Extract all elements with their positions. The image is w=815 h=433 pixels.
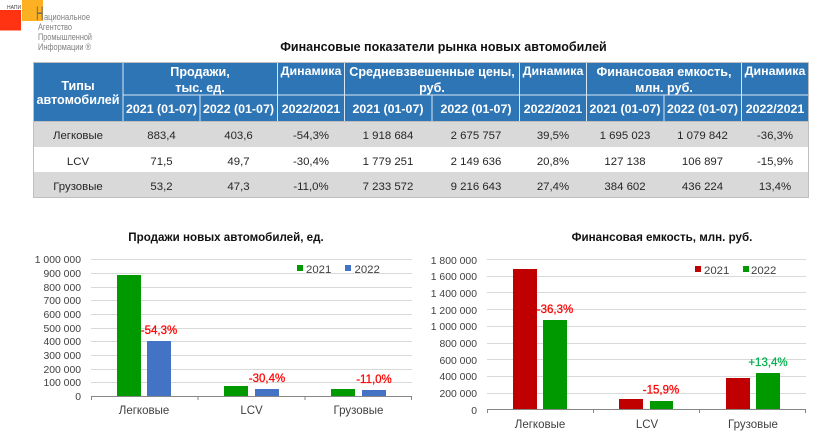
table row: LCV: 49,7	[227, 156, 250, 168]
table row: Грузовые: 13,4%	[759, 181, 791, 193]
table row: Легковые	[34, 122, 808, 147]
logo: НАПИ: Агентство	[38, 22, 72, 32]
y axis labels: sales: 600 000	[43, 310, 81, 321]
change labels: sales: -30,4%	[249, 373, 285, 385]
logo: НАПИ: ациональное	[44, 12, 90, 22]
bars: capacity 2022	[543, 320, 780, 409]
table header: 2021 (01-07)	[590, 102, 660, 116]
table row: Грузовые: 7 233 572	[363, 181, 413, 193]
y axis labels: financial capacity: 600 000	[439, 356, 477, 367]
y axis labels: financial capacity: 200 000	[439, 389, 477, 400]
y axis labels: financial capacity: 0	[471, 406, 477, 417]
table row: Грузовые: 436 224	[682, 181, 723, 193]
table row: Легковые: 403,6	[224, 130, 253, 142]
table row: Легковые: 1 918 684	[363, 130, 413, 142]
bars: capacity 2021	[513, 269, 750, 409]
y axis labels: financial capacity: 800 000	[439, 339, 477, 350]
y axis labels: sales: 400 000	[43, 337, 81, 348]
table row: Грузовые: 47,3	[227, 181, 250, 193]
y axis labels: financial capacity: 1 400 000	[431, 289, 477, 300]
title: Финансовые показатели рынка новых автомобилей	[280, 40, 607, 54]
chart title: sales: Продажи новых автомобилей, ед.	[128, 231, 324, 244]
change labels: sales: -54,3%	[141, 325, 177, 337]
table row: Легковые: 883,4	[147, 130, 176, 142]
legend: sales	[297, 264, 380, 276]
x axis labels: financial capacity: Легковые	[515, 419, 565, 431]
table row: Грузовые: 9 216 643	[451, 181, 501, 193]
bars: sales 2022	[147, 341, 386, 396]
table row: LCV: 1 779 251	[363, 156, 413, 168]
table row: Грузовые	[34, 172, 808, 197]
y axis labels: sales: 500 000	[43, 324, 81, 335]
table row: Грузовые: 53,2	[150, 181, 173, 193]
y axis labels: sales: 700 000	[43, 296, 81, 307]
legend: sales: 2021	[306, 264, 331, 276]
legend: financial capacity: 2022	[751, 265, 776, 277]
table header: 2021 (01-07)	[126, 102, 197, 116]
table row: Легковые: 2 675 757	[451, 130, 501, 142]
y axis labels: sales: 800 000	[43, 283, 81, 294]
x axis labels: financial capacity	[515, 419, 778, 431]
table header: Динамика	[281, 64, 341, 78]
table row: Грузовые: 27,4%	[537, 181, 569, 193]
y axis labels: sales: 100 000	[43, 378, 81, 389]
table header: Финансовая емкость,	[596, 65, 732, 79]
y axis labels: sales: 300 000	[43, 351, 81, 362]
table row: LCV: 71,5	[150, 156, 173, 168]
bars: sales 2021	[117, 275, 355, 396]
x axis labels: sales: LCV	[240, 405, 263, 417]
table row: Грузовые: Грузовые	[53, 181, 103, 193]
y axis labels: sales: 900 000	[43, 269, 81, 280]
change labels: financial capacity: -15,9%	[643, 384, 679, 396]
y axis labels: financial capacity: 1 000 000	[431, 322, 477, 333]
chart: sales of new cars	[35, 231, 412, 417]
change labels: sales: -11,0%	[356, 374, 392, 386]
table row: LCV: 127 138	[604, 156, 646, 168]
x axis labels: sales: Грузовые	[334, 405, 383, 417]
table row: Легковые: -36,3%	[757, 130, 793, 142]
table row: Легковые: 39,5%	[537, 130, 569, 142]
y axis labels: financial capacity: 1 800 000	[431, 256, 477, 267]
table header: Типы	[61, 79, 95, 93]
table header: 2022 (01-07)	[203, 102, 274, 116]
table row: LCV: -30,4%	[293, 156, 329, 168]
table header: Продажи,	[170, 65, 230, 79]
change labels: financial capacity: +13,4%	[748, 357, 788, 369]
table row: Легковые: Легковые	[53, 130, 103, 142]
x axis labels: sales: Легковые	[119, 405, 169, 417]
y axis labels: financial capacity: 1 200 000	[431, 306, 477, 317]
table header: Динамика	[745, 64, 805, 78]
table header: тыс. ед.	[175, 81, 225, 95]
change labels: sales	[141, 325, 392, 386]
logo: НАПИ: Информации ®	[38, 42, 91, 52]
table row: LCV: 106 897	[682, 156, 723, 168]
table row: Легковые: 1 695 023	[600, 130, 650, 142]
x axis labels: financial capacity: Грузовые	[728, 419, 778, 431]
table header: 2022/2021	[282, 102, 340, 116]
logo: НАПИ: Н	[36, 4, 44, 25]
legend: financial capacity	[695, 265, 776, 277]
table row: LCV: LCV	[67, 156, 89, 168]
table header: Динамика	[523, 64, 583, 78]
table header: Средневзвешенные цены,	[349, 65, 515, 79]
table header: млн. руб.	[635, 81, 693, 95]
table row: Грузовые: 384 602	[604, 181, 646, 193]
chart title: financial capacity: Финансовая емкость, млн. руб.	[572, 231, 752, 244]
table header: 2022 (01-07)	[441, 102, 511, 116]
legend: financial capacity: 2021	[704, 265, 729, 277]
y axis labels: sales	[35, 255, 81, 403]
table header: 2021 (01-07)	[353, 102, 423, 116]
y axis labels: sales: 1 000 000	[35, 255, 81, 266]
table row: LCV	[34, 147, 808, 172]
table row: Легковые: -54,3%	[293, 130, 329, 142]
table header	[34, 63, 808, 121]
table header: 2022 (01-07)	[667, 102, 738, 116]
logo: НАПИ	[0, 0, 92, 52]
table header: автомобилей	[36, 93, 120, 107]
chart: financial capacity	[431, 231, 806, 431]
y axis labels: financial capacity	[431, 256, 477, 417]
table: financial indicators	[33, 62, 809, 198]
x axis labels: financial capacity: LCV	[636, 419, 659, 431]
change labels: financial capacity	[537, 304, 788, 396]
table row: Грузовые: -11,0%	[293, 181, 329, 193]
change labels: financial capacity: -36,3%	[537, 304, 573, 316]
table row: LCV: -15,9%	[757, 156, 793, 168]
y axis labels: sales: 200 000	[43, 365, 81, 376]
x axis labels: sales	[119, 405, 383, 417]
table row: LCV: 2 149 636	[451, 156, 501, 168]
table header: 2022/2021	[746, 102, 804, 116]
legend: sales: 2022	[354, 264, 380, 276]
y axis labels: financial capacity: 1 600 000	[431, 272, 477, 283]
table row: LCV: 20,8%	[537, 156, 569, 168]
y axis labels: sales: 0	[75, 392, 81, 403]
y axis labels: financial capacity: 400 000	[439, 372, 477, 383]
logo: НАПИ: Промышленной	[38, 32, 92, 42]
table header: руб.	[419, 81, 445, 95]
logo: НАПИ: НАПИ	[7, 5, 21, 11]
table header: 2022/2021	[524, 102, 582, 116]
table row: Легковые: 1 079 842	[677, 130, 728, 142]
